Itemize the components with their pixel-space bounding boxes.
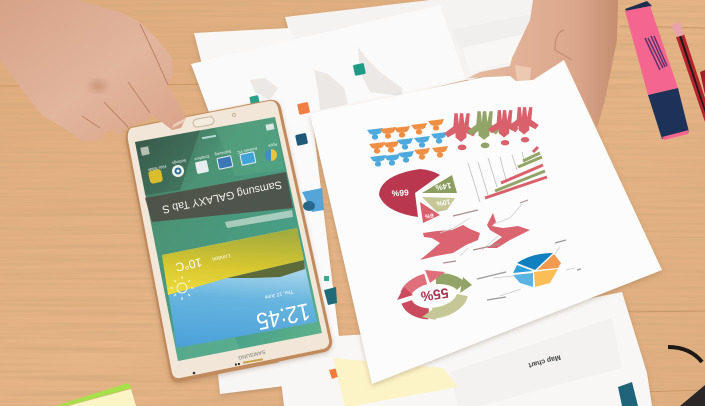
sheet [310, 60, 662, 384]
home button [192, 116, 215, 128]
app icons [148, 149, 277, 184]
knuckle shadow [90, 81, 106, 91]
paper: world map sheet [191, 5, 466, 345]
palm and fingers [0, 0, 186, 142]
camera [232, 113, 236, 117]
slice 14% [422, 175, 457, 193]
label: dropbox: Dropbox [194, 154, 210, 162]
time: 12:45 [254, 297, 312, 335]
blue map fragment [302, 188, 324, 212]
bars [485, 177, 547, 198]
label 66%: 66% [391, 187, 409, 199]
teal tab on bottom sheet [618, 382, 638, 406]
row 2 [369, 132, 447, 154]
weather sky [162, 228, 317, 348]
thumb nail [515, 65, 531, 81]
date: Thu, 12 June [264, 288, 294, 300]
arrow tan [431, 295, 464, 313]
paper: lower middle sheet [276, 292, 652, 406]
circular arrows 55% [397, 270, 472, 320]
icon: blue music [217, 156, 233, 169]
banner text: Samsung GALAXY Tab S [161, 178, 283, 215]
blue blob [303, 201, 315, 211]
arrow heads [460, 277, 472, 293]
label 10%: 10% [435, 197, 451, 207]
black strap and object [668, 347, 705, 406]
row 3 [370, 146, 448, 167]
callout labels [443, 200, 528, 263]
label 14%: 14% [435, 181, 452, 192]
slice blue [513, 265, 533, 273]
paper: lower left sheet under tablet [218, 362, 284, 394]
widget icon [265, 123, 275, 131]
status bar [202, 135, 216, 139]
slice 66% [379, 169, 440, 217]
label: kids mode: Kids Mode [147, 164, 167, 173]
teal tree cluster [324, 287, 337, 305]
tablet copper rim [126, 100, 332, 382]
weather grass [162, 228, 304, 295]
orange marker below [329, 368, 340, 379]
map chart caption: Map chart [527, 353, 561, 369]
icon: round colour [265, 149, 277, 161]
barcode [645, 36, 667, 70]
label: remote pc: Remote PC [236, 146, 258, 155]
map pin icons [249, 63, 366, 379]
label 6%: 6% [424, 211, 434, 219]
landmass left [420, 225, 480, 260]
back papers stack [191, 0, 652, 406]
pin: navy [295, 133, 308, 146]
main infographic sheet [310, 60, 662, 384]
finger creases [82, 24, 168, 128]
crease [555, 30, 572, 60]
yellow note [68, 389, 136, 406]
second pencil [700, 70, 705, 95]
pink highlighter [625, 1, 689, 140]
pie chart with percentages [379, 169, 457, 223]
slice light blue [513, 273, 533, 287]
people icon rows [367, 119, 448, 167]
left hand [0, 0, 186, 142]
icon: yellow store [148, 169, 163, 184]
callouts [493, 247, 575, 296]
label: apps: Apps [268, 142, 278, 149]
horizontal bar chart [468, 147, 547, 202]
hand shape [468, 0, 618, 128]
paper: far top sheet [285, 0, 536, 80]
temperature: 10°C [174, 255, 203, 274]
gridlines [468, 152, 525, 202]
teal dot [324, 276, 329, 281]
arrow green [436, 275, 461, 289]
gold bar [243, 358, 263, 364]
pin: orange [297, 102, 310, 115]
landmass right [487, 213, 530, 248]
slice 10% [422, 197, 455, 212]
slice yellow [534, 269, 558, 287]
strap [668, 347, 702, 362]
rear cap [625, 1, 652, 12]
search bar [225, 210, 293, 228]
speaker dots [235, 363, 240, 366]
navy cap [648, 88, 689, 139]
red pencil [671, 22, 705, 122]
green and yellow sticky notes [55, 383, 136, 406]
icon: recycle [195, 160, 209, 174]
yellow sticky note [333, 358, 458, 406]
large red and green people icons [444, 107, 539, 150]
paper: left sheet [194, 28, 310, 135]
lower dot [193, 372, 195, 374]
pin: teal left [249, 95, 260, 106]
brand text: SAMSUNG [237, 348, 266, 360]
arrow red light [404, 279, 427, 294]
paper: map chart panel [450, 318, 622, 406]
arrow red dark [407, 299, 429, 317]
slice dark blue [517, 253, 553, 270]
ferrule and eraser [671, 22, 684, 37]
callout lines [440, 204, 522, 256]
faint world map on back sheet [250, 47, 402, 110]
object corner [680, 385, 705, 406]
fingernail [172, 118, 186, 128]
slice orange [537, 254, 561, 270]
label: samsung: Samsung [214, 149, 232, 157]
tablet [126, 100, 332, 382]
right hand [468, 0, 618, 128]
pink body [625, 6, 678, 95]
sun icon [170, 276, 194, 300]
screen [135, 117, 322, 361]
screen wallpaper facets [135, 117, 284, 361]
black stripe [679, 35, 705, 113]
row 1 [367, 119, 444, 140]
city: London [212, 252, 231, 262]
icon: settings gear [172, 165, 184, 177]
dark banner [145, 172, 293, 222]
green note edge [55, 383, 132, 406]
distant hill [227, 260, 305, 278]
app labels [147, 142, 278, 173]
icon: blue photos [240, 152, 256, 165]
small colour pie chart [477, 240, 581, 300]
red world map with callouts [420, 200, 530, 263]
slice 6% [420, 202, 440, 223]
app grid icon [140, 146, 150, 156]
tablet white face [128, 101, 329, 378]
pencil shaft [676, 34, 705, 122]
55% label: 55% [419, 285, 450, 305]
callout labels [477, 240, 581, 300]
label: settings: Settings [172, 158, 187, 166]
pin: teal top [353, 63, 366, 76]
cap tip [662, 130, 689, 140]
